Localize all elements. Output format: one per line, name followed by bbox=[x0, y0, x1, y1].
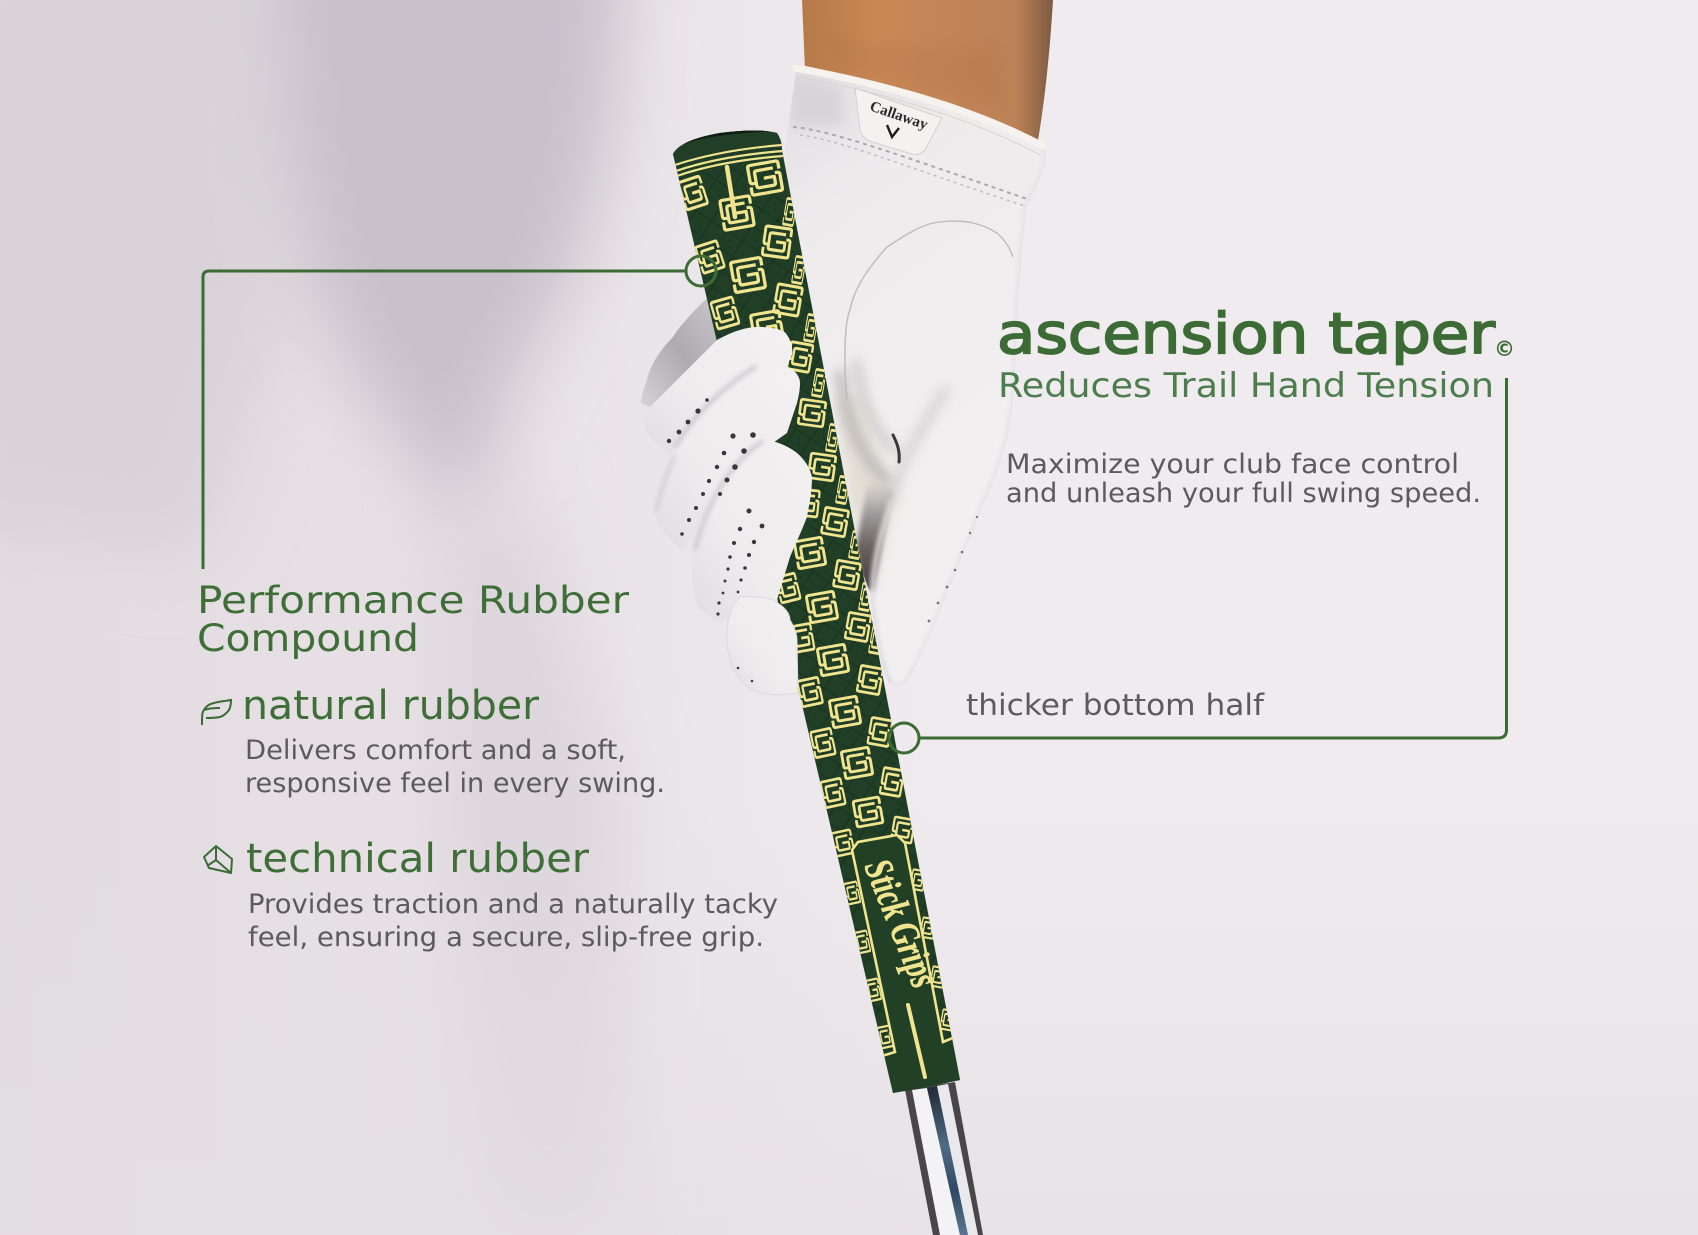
text: technical rubber description: Provides traction and a naturally tacky bbox=[248, 889, 778, 920]
index finger bbox=[644, 327, 792, 455]
text: technical rubber description: feel, ensuring a secure, slip-free grip. bbox=[248, 922, 764, 953]
left shading of middle finger bbox=[656, 455, 675, 512]
callout line: thicker bottom half bbox=[889, 378, 1506, 753]
heading: performance rubber compound bbox=[197, 579, 630, 660]
text: natural rubber description: Delivers comfort and a soft, bbox=[245, 735, 626, 766]
ring finger bbox=[692, 440, 812, 623]
callaway tag bbox=[855, 88, 942, 154]
text: natural rubber description: responsive feel in every swing. bbox=[245, 768, 665, 799]
icon: leaf bbox=[202, 700, 231, 725]
gloved fingers bbox=[644, 327, 812, 695]
grip cap rim bbox=[673, 130, 782, 164]
text: taper benefit: and unleash your full swing speed. bbox=[1006, 478, 1481, 509]
label: thicker bottom half: thicker bottom half bbox=[966, 688, 1265, 722]
golf club shaft bbox=[905, 1082, 983, 1235]
palm seam bbox=[845, 221, 1013, 400]
icon: rubber cube bbox=[204, 846, 232, 873]
pinky finger bbox=[727, 597, 798, 695]
thumb perforations bbox=[928, 516, 978, 622]
subtitle: reduces trail hand tension: Reduces Trail Hand Tension bbox=[998, 366, 1494, 406]
grip logo pattern bbox=[678, 161, 956, 1049]
finger perforations bbox=[667, 398, 764, 682]
grip label plaque: Stick Grips bbox=[856, 853, 948, 994]
heading: natural rubber: natural rubber bbox=[242, 683, 540, 729]
glove cuff edge bbox=[796, 68, 1043, 146]
heading: performance rubber compound: Performance Rubber bbox=[197, 579, 630, 622]
glove palm bbox=[785, 64, 1046, 686]
text: taper benefit bbox=[1006, 449, 1481, 509]
title: ascension taper: ascension taper bbox=[997, 302, 1496, 367]
text: natural rubber description bbox=[245, 735, 665, 799]
title: ascension taper: © bbox=[1494, 337, 1515, 361]
heading: technical rubber: technical rubber bbox=[246, 836, 590, 882]
grip label plaque bbox=[852, 835, 962, 1095]
palm heel behind grip bbox=[641, 297, 722, 408]
callaway tag: Callaway bbox=[868, 99, 930, 133]
shading between index and middle fingers bbox=[675, 366, 757, 448]
callout line: performance rubber compound bbox=[203, 256, 716, 569]
heading: performance rubber compound: Compound bbox=[197, 617, 419, 660]
text: technical rubber description bbox=[248, 889, 778, 953]
text: taper benefit: Maximize your club face control bbox=[1006, 449, 1459, 480]
shading between middle and ring fingers bbox=[695, 441, 763, 550]
middle finger bbox=[654, 364, 800, 550]
cuff stitching bbox=[793, 127, 1030, 200]
forearm bbox=[802, 0, 1053, 140]
grip bbox=[670, 126, 962, 1095]
